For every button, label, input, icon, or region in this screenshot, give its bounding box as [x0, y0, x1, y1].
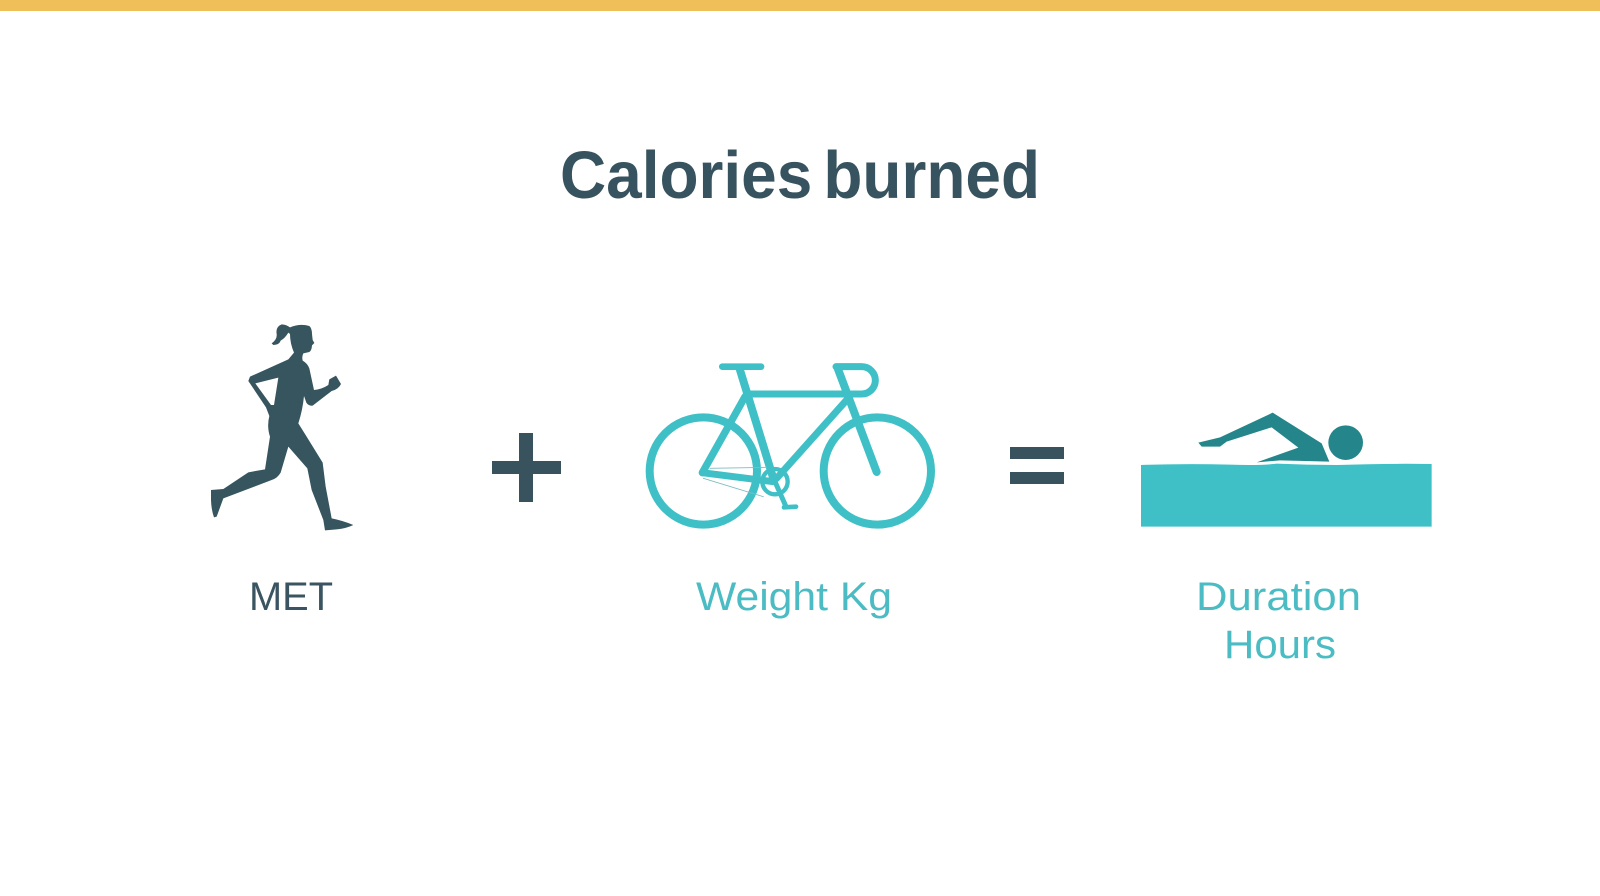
label: Duration Hours: Duration [1196, 575, 1361, 619]
icon: swimmer in water (duration) [1141, 413, 1432, 527]
icon: runner (MET) [211, 324, 353, 530]
label: Duration Hours [1196, 575, 1361, 667]
top accent bar [0, 0, 1600, 11]
icon: plus sign [492, 433, 561, 502]
label: MET: MET [249, 575, 333, 619]
title: Calories burned [560, 138, 1040, 213]
label: Duration Hours: Hours [1224, 623, 1336, 667]
icon: bicycle (weight) [650, 367, 931, 525]
icon: equals sign [1010, 447, 1064, 484]
label: Weight Kg: Weight Kg [696, 575, 892, 619]
